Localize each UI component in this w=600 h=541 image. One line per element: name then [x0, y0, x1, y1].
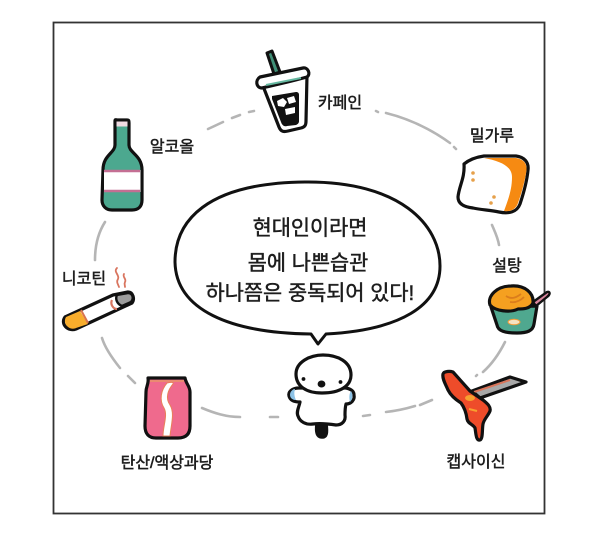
icon: cigarette with smoke	[63, 268, 133, 330]
icon: chili sauce spoon	[443, 371, 526, 440]
icon: soju bottle	[102, 120, 142, 210]
speech bubble text: 몸에 나쁜습관	[248, 252, 368, 275]
icon: sugary dessert cup	[489, 286, 550, 333]
label: capsaicin: 캡사이신	[447, 453, 505, 471]
panel frame	[54, 22, 544, 514]
label: sugar: 설탕	[492, 257, 522, 275]
label: caffeine: 카페인	[318, 94, 362, 112]
icon: iced coffee cup	[257, 51, 309, 132]
label: nicotine: 니코틴	[62, 270, 106, 288]
label: soda and liquid fructose: 탄산/액상과당	[121, 454, 214, 472]
speech bubble	[175, 182, 440, 344]
icon: soda can	[145, 378, 190, 438]
speech bubble text: 현대인이라면	[253, 217, 367, 240]
label: flour: 밀가루	[470, 127, 514, 145]
speech bubble text	[206, 217, 414, 305]
icon: panda character	[289, 355, 354, 438]
icon: toast bread	[458, 156, 528, 213]
dashed cycle ring	[95, 111, 505, 417]
speech bubble text: 하나쯤은 중독되어 있다!	[206, 282, 414, 305]
label: alcohol: 알코올	[150, 138, 194, 156]
